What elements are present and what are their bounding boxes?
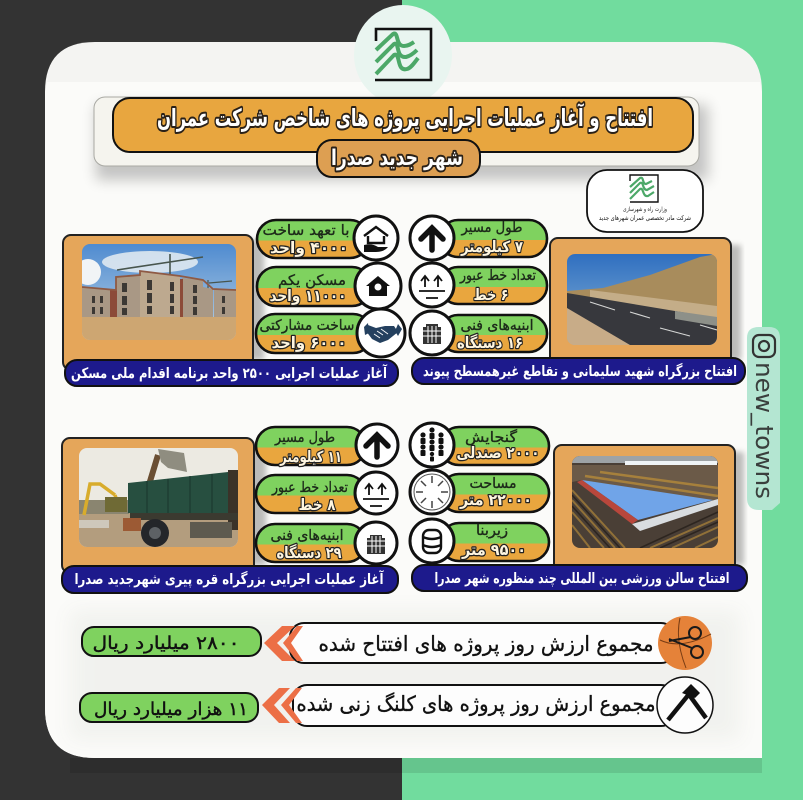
value row: groundbreaking projects: مجموع ارزش روز پروژه های کلنگ زنی شده — [296, 692, 656, 716]
icon: handshake — [357, 309, 405, 357]
stat: route length 11: طول مسیر — [274, 430, 335, 446]
stat: floor area: زیربنا — [476, 523, 508, 539]
icon: lanes — [355, 472, 397, 514]
value row: opened projects: مجموع ارزش روز پروژه های افتتاح شده — [318, 632, 654, 656]
icon: pickaxe — [657, 677, 713, 733]
value pill — [80, 693, 258, 722]
instagram tag — [747, 327, 780, 510]
small logo card: وزارت راه و شهرسازی — [623, 206, 667, 213]
caption bar — [65, 360, 398, 386]
value row: opened projects — [82, 616, 712, 670]
caption bar: آغاز عملیات اجرایی بزرگراه قره پیری شهرجدید صدرا — [74, 570, 384, 588]
stat: commitment build: با تعهد ساخت — [262, 223, 350, 239]
stat: first housing: مسکن یکم — [278, 273, 346, 289]
panel: truck — [62, 438, 398, 593]
stat: partnership: ساخت مشارکتی — [260, 318, 354, 334]
stat: commitment build: ۴۰۰۰ واحد — [270, 239, 348, 257]
stat: route length 11: ۱۱ کیلومتر — [279, 448, 342, 466]
photo: road — [567, 254, 717, 345]
stat: route length 11 — [256, 424, 398, 466]
stat: area — [410, 470, 549, 514]
stat: route length 7: ۷ کیلومتر — [460, 238, 523, 256]
stat: lanes 8: ۸ خط — [298, 496, 336, 514]
caption bar — [412, 358, 745, 384]
value pill: ۱۱ هزار میلیارد ریال — [94, 699, 248, 720]
stat: capacity — [410, 423, 549, 467]
icon: buildings — [355, 522, 397, 564]
icon: house in hand — [354, 216, 398, 260]
stat: structures 29 — [256, 522, 397, 564]
icon: arrow — [356, 424, 398, 466]
subtitle pill: شهر جدید صدرا — [331, 146, 463, 171]
icon: outward arrows — [410, 470, 454, 514]
top logo badge — [354, 5, 452, 105]
stat: floor area: ۹۵۰۰ متر — [461, 541, 526, 559]
value pill — [82, 627, 261, 656]
icon: crowd — [410, 423, 454, 467]
small logo card: شرکت مادر تخصصی عمران شهرهای جدید — [599, 214, 691, 222]
handle: new_towns — [750, 362, 778, 499]
panel: housing — [63, 235, 398, 386]
small logo card — [587, 170, 703, 232]
stat: partnership — [256, 309, 405, 357]
panel: highway — [412, 238, 745, 384]
icon: database — [410, 519, 454, 563]
stat: lanes 6 — [410, 263, 547, 307]
stat: area: مساحت — [470, 476, 516, 492]
stat: capacity: ۲۰۰۰ صندلی — [456, 444, 540, 462]
icon: buildings — [410, 311, 454, 355]
title panel — [94, 97, 708, 180]
stat: lanes 6: تعداد خط عبور — [459, 268, 536, 284]
icon: instagram — [753, 335, 775, 357]
stat: structures 16 — [410, 311, 547, 355]
stat: commitment build — [257, 216, 398, 260]
icon: scissors — [658, 616, 712, 670]
stat: structures 16: ۱۶ دستگاه — [457, 333, 523, 352]
caption bar: آغاز عملیات اجرایی ۲۵۰۰ واحد برنامه اقدام ملی مسکن — [71, 364, 388, 382]
photo: buildings — [75, 244, 236, 340]
stat: first housing — [257, 263, 401, 309]
panel: arena — [412, 445, 747, 591]
stat: route length 7: طول مسیر — [461, 220, 522, 236]
stat: structures 29: ۲۹ دستگاه — [276, 543, 342, 562]
chevrons — [264, 626, 303, 661]
value pill: ۲۸۰۰ میلیارد ریال — [92, 633, 239, 654]
chevrons — [262, 688, 302, 723]
caption bar — [412, 565, 747, 591]
photo: sports hall — [572, 456, 718, 548]
stat: lanes 8: تعداد خط عبور — [271, 480, 348, 496]
stat: route length 7 — [410, 216, 547, 260]
photo: dump truck — [79, 448, 238, 547]
icon: arrow — [410, 216, 454, 260]
card — [45, 42, 762, 758]
stat: first housing: ۱۱۰۰۰ واحد — [270, 287, 346, 305]
stat: structures 29: ابنیه‌های فنی — [270, 528, 344, 544]
stat: lanes 6: ۶ خط — [474, 286, 508, 304]
caption bar — [62, 566, 398, 593]
stat: structures 16: ابنیه‌های فنی — [460, 318, 534, 334]
icon: house key — [355, 263, 401, 309]
value row: groundbreaking projects — [80, 677, 713, 733]
stat: area: ۲۲۰۰۰ متر — [459, 491, 532, 509]
stat: lanes 8 — [256, 472, 397, 514]
stat: floor area — [410, 519, 549, 563]
icon: lanes — [410, 263, 454, 307]
stat: partnership: ۶۰۰۰ واحد — [272, 334, 346, 352]
stat: capacity: گنجایش — [465, 429, 517, 446]
subtitle pill — [317, 140, 480, 177]
